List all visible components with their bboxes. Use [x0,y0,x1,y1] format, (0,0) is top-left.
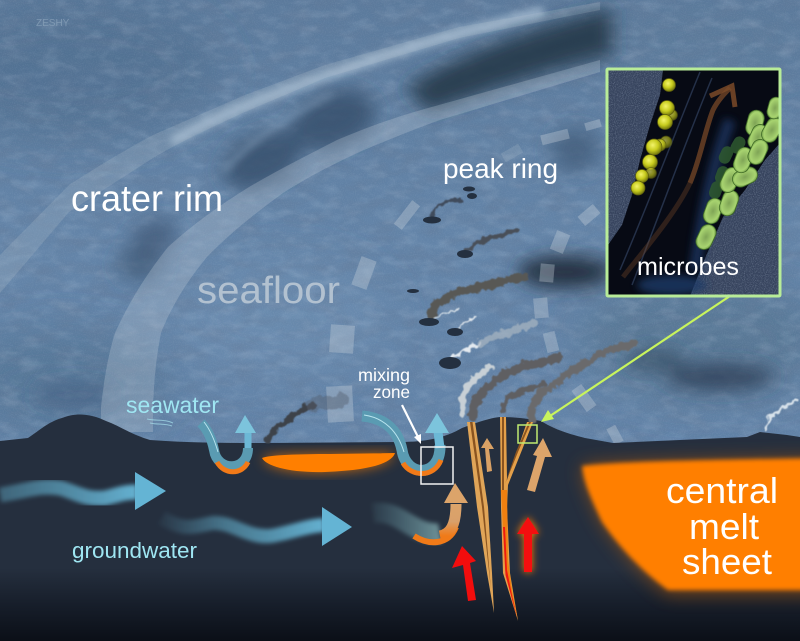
label: central melt sheet: melt [689,506,759,547]
rim crest highlights and shadows [35,8,775,407]
small lens smoke plume [268,405,313,441]
label: central melt sheet: sheet [682,541,772,582]
arrow: tan large upflow [527,438,552,492]
black smoke plume centre [503,383,543,411]
black smoke plume left [473,356,558,417]
panel: subsurface cross-section [0,414,800,641]
arrow: mixing zone pointer [402,405,421,444]
inner crater ring band [101,60,600,432]
blue streaks in channel [620,72,730,295]
arrow: microbes pointer [541,296,730,422]
black smoke plume right [532,343,634,420]
far right white vent plume [766,400,797,430]
sediment wall left [608,70,664,246]
white steam plume [462,367,491,415]
arrow: groundwater middle [162,507,352,546]
flow arrow [623,86,735,277]
fractures / vent conduits [467,417,533,621]
centre conduit [500,417,533,621]
label: groundwater: groundwater [72,538,197,563]
signature: ZESHY [36,18,70,29]
outer crater rim ring band [0,2,600,293]
panel: seafloor background [0,0,800,470]
label: seafloor: seafloor [197,270,340,312]
vent dark patches [407,186,477,369]
panel: microbes inset [607,69,785,296]
arrow: red upflow left [452,546,476,601]
arrow: red upflow right [517,517,539,572]
arrow: seawater U mixing [362,413,449,474]
label: central melt sheet [666,470,778,582]
label: microbes: microbes [637,253,739,281]
lens smoke haze [313,400,342,405]
label: seawater: seawater [126,392,219,418]
dark background bacilli [709,136,746,198]
arrow: mixing curve rising from groundwater [373,483,468,542]
seafloor smoke: peak ring vents [431,200,534,358]
sediment wall right [690,143,780,296]
yellow cocci [631,78,678,195]
mixing zone box [421,447,453,484]
seafloor dark vent cloud [517,256,613,288]
microbe zone box [518,425,537,443]
label: crater rim: crater rim [71,178,223,219]
label: peak ring: peak ring [443,153,558,184]
central melt sheet [582,458,800,594]
green bacilli [696,96,778,250]
hydrothermal vent smoke [268,343,634,441]
label: central melt sheet: central [666,470,778,511]
arrow: seawater U left [201,415,256,472]
left conduit [467,422,494,613]
label: mixing zone: mixing [358,365,410,385]
label: mixing zone [358,365,410,402]
peak ring dashed band [326,119,624,445]
small wisps beside seawater [147,419,173,426]
icon: melt lens [262,453,395,472]
arrow: tan small upflow [481,438,494,472]
arrow: groundwater upper [0,472,166,510]
label: mixing zone: zone [373,382,410,402]
